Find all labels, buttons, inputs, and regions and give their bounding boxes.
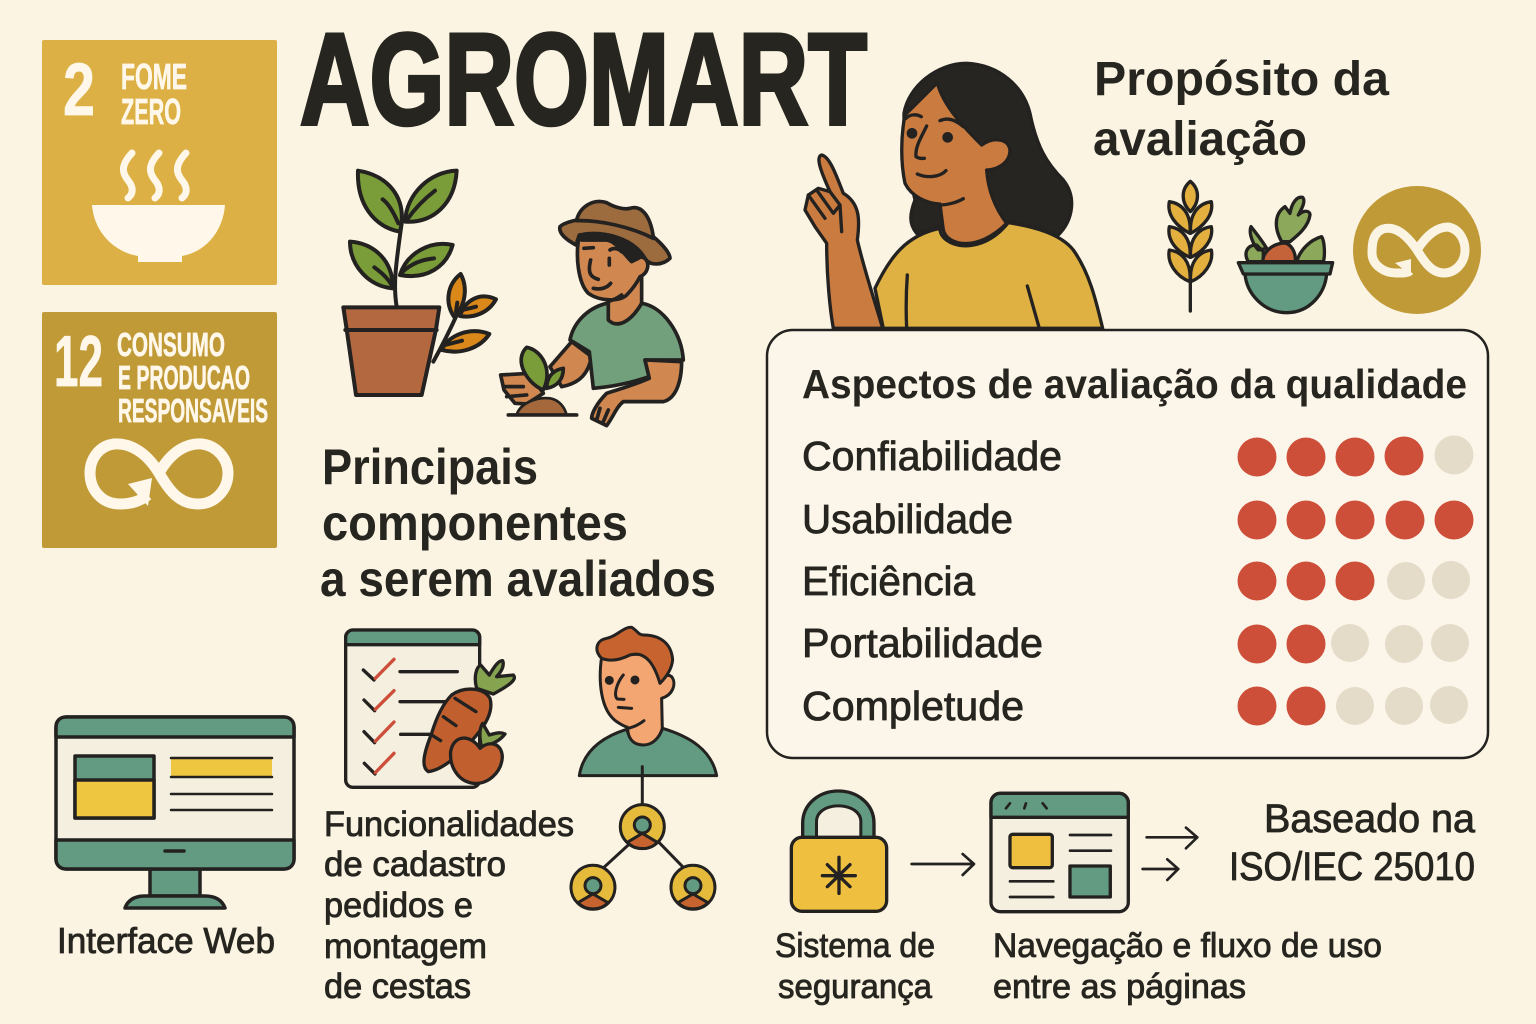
text: based on standard: ISO/IEC 25010 bbox=[1229, 845, 1475, 889]
text: based on standard: Baseado na bbox=[1264, 797, 1476, 841]
icon: wheat bbox=[1169, 181, 1212, 311]
icon: padlock bbox=[791, 791, 887, 911]
rating: Eficiência: Eficiência bbox=[802, 558, 975, 604]
heading: main components: a serem avaliados bbox=[320, 551, 716, 607]
label: security system: segurança bbox=[778, 968, 932, 1006]
heading: purpose bbox=[1093, 53, 1389, 166]
panel: SDG 12 responsible consumption: 12 bbox=[54, 322, 103, 402]
arrow: security to navigation bbox=[912, 854, 974, 875]
icon: potted plant bbox=[343, 171, 496, 395]
icon: user network bbox=[571, 627, 717, 909]
panel: SDG 2 zero hunger: 2 bbox=[63, 48, 95, 131]
node: left user bbox=[571, 865, 615, 909]
icon: checklist with produce bbox=[346, 630, 514, 787]
rating: Completude bbox=[802, 683, 1468, 729]
label: features: de cestas bbox=[324, 967, 471, 1006]
label: security system: Sistema de bbox=[775, 927, 935, 965]
panel: SDG 2 zero hunger: ZERO bbox=[121, 91, 181, 132]
node: right user bbox=[671, 865, 715, 909]
label: features: pedidos e bbox=[324, 886, 473, 925]
heading: main components: componentes bbox=[322, 495, 628, 551]
heading: main components: Principais bbox=[322, 439, 538, 495]
panel: SDG 2 zero hunger bbox=[42, 40, 277, 285]
rating: Portabilidade bbox=[802, 620, 1469, 666]
panel: SDG 12 responsible consumption bbox=[42, 312, 277, 548]
icon: circular economy badge bbox=[1353, 186, 1481, 314]
panel: SDG 12 responsible consumption: E PRODUCAO bbox=[118, 359, 250, 396]
heading: purpose: avaliação bbox=[1093, 113, 1307, 166]
heading: purpose: Propósito da bbox=[1094, 53, 1389, 106]
heading: quality aspects: Aspectos de avaliação da qualidade bbox=[802, 361, 1467, 407]
title: AGROMART bbox=[300, 6, 867, 152]
panel: quality aspects bbox=[767, 330, 1488, 758]
rating: Portabilidade: Portabilidade bbox=[802, 620, 1043, 666]
label: features: de cadastro bbox=[324, 845, 506, 884]
label: features bbox=[324, 805, 574, 1006]
icon: infinity loop bbox=[90, 444, 228, 506]
label: features: Funcionalidades bbox=[324, 805, 574, 844]
heading: main components bbox=[320, 439, 716, 607]
hair bbox=[904, 63, 1072, 235]
rating: Completude: Completude bbox=[802, 683, 1024, 729]
panel: SDG 2 zero hunger: FOME bbox=[121, 56, 187, 97]
arrows: toward standard bbox=[1143, 828, 1197, 880]
rating: Confiabilidade: Confiabilidade bbox=[802, 433, 1062, 479]
arm and hand bbox=[805, 155, 883, 328]
face and neck bbox=[902, 83, 1010, 244]
panel: SDG 12 responsible consumption: CONSUMO bbox=[117, 326, 225, 363]
icon: web page layout bbox=[991, 793, 1128, 912]
icon: vegetable bowl bbox=[1238, 197, 1333, 313]
rating: Confiabilidade bbox=[802, 433, 1474, 479]
rating: Eficiência bbox=[802, 558, 1470, 604]
node: top user bbox=[620, 805, 664, 849]
label: navigation flow: entre as páginas bbox=[993, 968, 1246, 1006]
icon: steaming bowl bbox=[92, 153, 225, 262]
text: based on standard bbox=[1229, 797, 1476, 889]
icon: farmer planting bbox=[501, 202, 683, 426]
label: security system bbox=[775, 927, 935, 1006]
icon: web monitor bbox=[56, 717, 294, 908]
icon: woman pointing bbox=[805, 63, 1103, 328]
label: navigation flow bbox=[993, 927, 1382, 1006]
rating: Usabilidade bbox=[802, 496, 1474, 542]
label: web interface: Interface Web bbox=[57, 920, 275, 961]
panel: SDG 12 responsible consumption: RESPONSAVEIS bbox=[118, 392, 268, 429]
shirt bbox=[875, 223, 1103, 328]
label: navigation flow: Navegação e fluxo de uso bbox=[993, 927, 1382, 965]
rating: Usabilidade: Usabilidade bbox=[802, 496, 1013, 542]
label: features: montagem bbox=[324, 927, 487, 966]
